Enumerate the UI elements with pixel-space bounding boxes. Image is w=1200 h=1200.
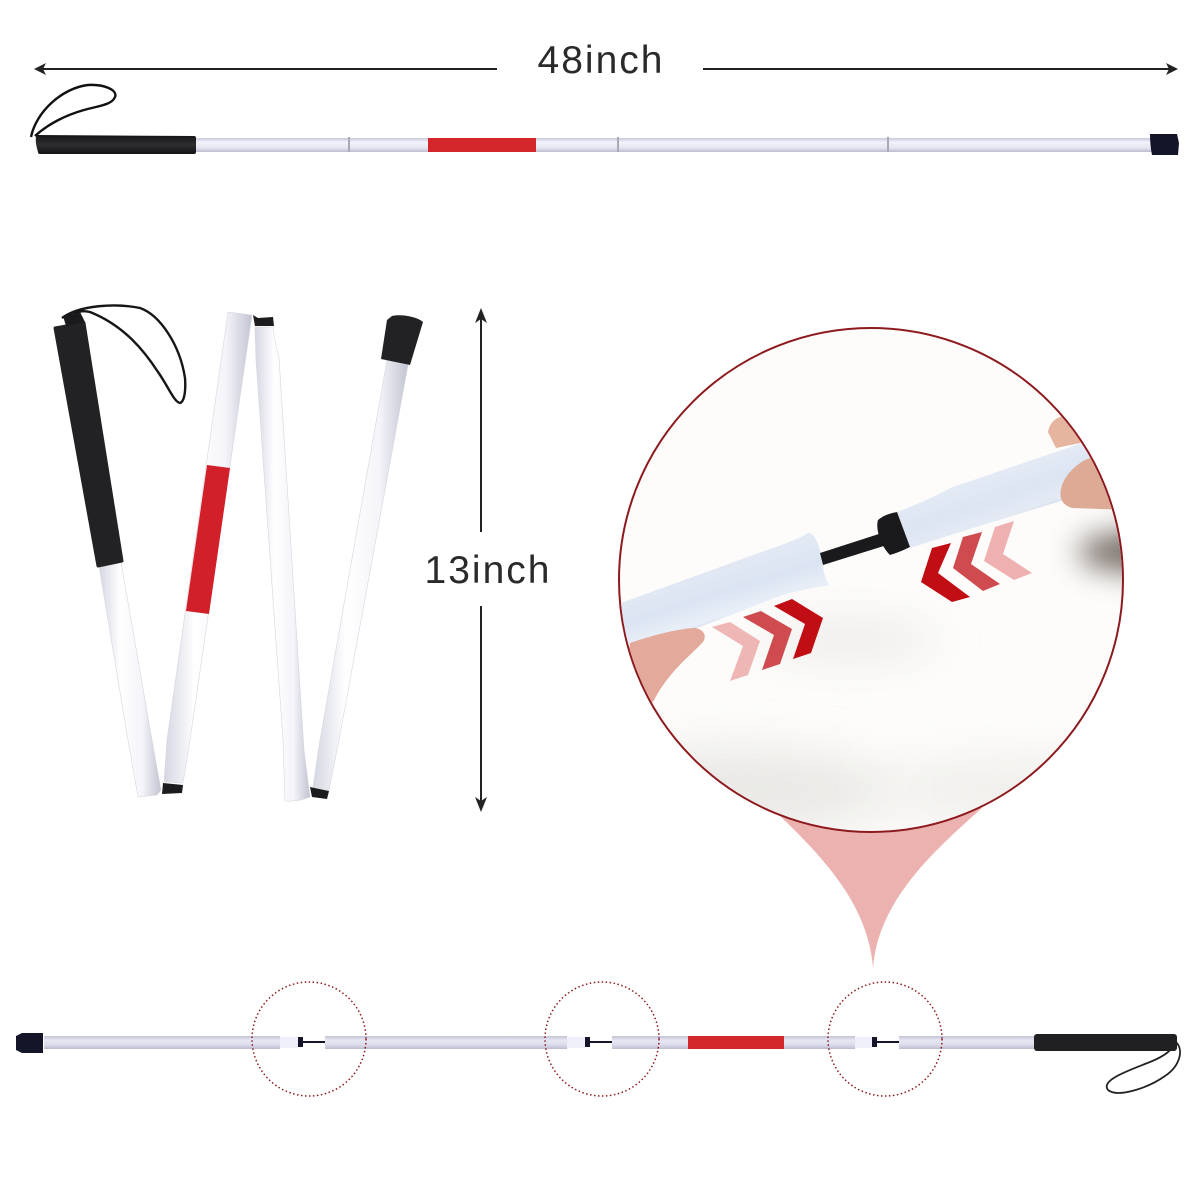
folded cane	[55, 305, 423, 801]
height dimension: 13inch: 13inch	[425, 549, 551, 592]
top width dimension: 48inch	[34, 39, 1178, 82]
unfolded cane, top	[31, 85, 1179, 155]
right tube	[897, 443, 1095, 548]
unfolded cane with joints, bottom	[16, 982, 1180, 1096]
section 2	[164, 312, 252, 783]
pink callout wedge	[776, 780, 982, 968]
fingers	[1048, 416, 1082, 448]
left tube	[618, 533, 829, 645]
section 4	[313, 360, 408, 790]
soft shadows	[1078, 532, 1200, 572]
magnified circle: connector detail	[618, 327, 1124, 833]
section 1 grip	[55, 323, 122, 566]
section 1 white	[99, 562, 161, 797]
top width dimension: 48inch: 48inch	[538, 39, 664, 82]
strap	[62, 305, 185, 403]
section 3	[255, 327, 310, 801]
red chevrons, left-pointing	[921, 543, 970, 602]
height dimension: 13inch	[425, 308, 551, 812]
red chevrons, right-pointing	[712, 622, 760, 681]
pin and collar	[820, 534, 884, 565]
joint circles	[252, 982, 366, 1096]
